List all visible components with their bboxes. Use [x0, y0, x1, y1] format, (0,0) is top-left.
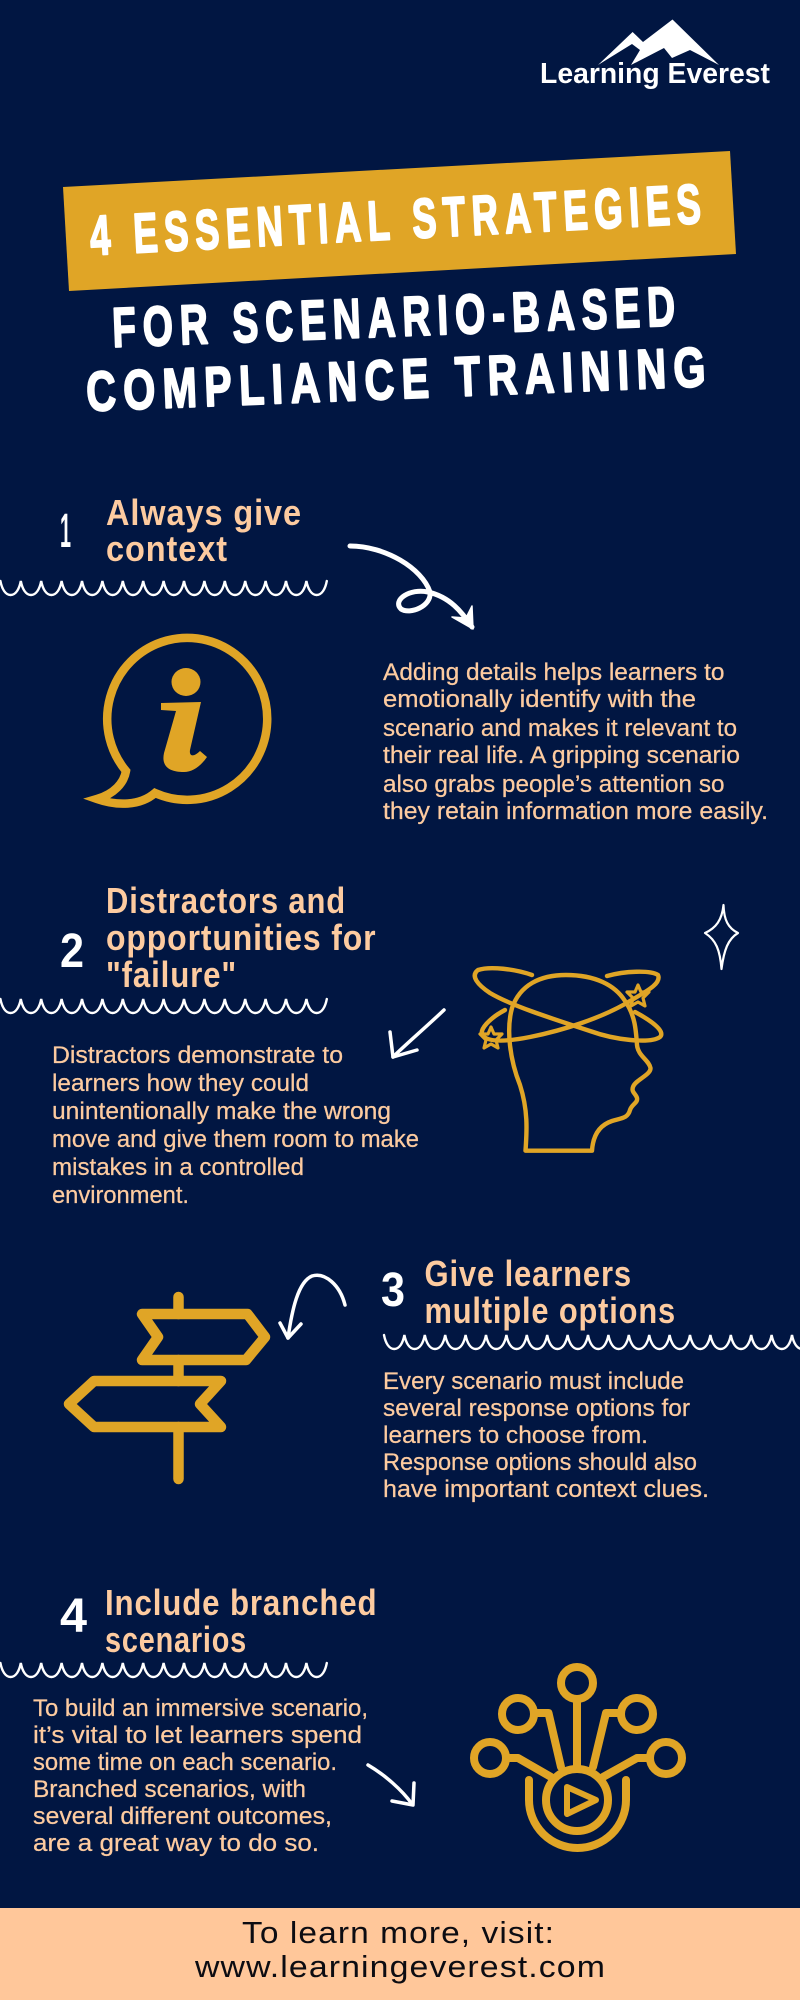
- heading text: scenarios: [105, 1619, 247, 1660]
- icon: signpost: [69, 1297, 265, 1479]
- footer text: To learn more, visit:: [242, 1915, 555, 1950]
- section 3 body text: learners to choose from.: [383, 1422, 648, 1449]
- section 3 body text: [383, 1368, 709, 1503]
- section 3 body text: Response options should also: [383, 1449, 697, 1476]
- icon: branching video network: [474, 1667, 682, 1848]
- section 2 body text: unintentionally make the wrong: [52, 1098, 391, 1125]
- number 3: 3: [381, 1264, 405, 1317]
- heading text: Always give: [106, 492, 302, 533]
- number 2: 2: [60, 925, 84, 978]
- section 2 body text: mistakes in a controlled: [52, 1154, 304, 1181]
- icon: sparkle: [705, 905, 738, 969]
- section 2 body text: [52, 1042, 419, 1209]
- section 1 body text: Adding details helps learners to: [383, 659, 724, 686]
- heading text: [106, 880, 376, 995]
- section 2 body text: Distractors demonstrate to: [52, 1042, 343, 1069]
- arrow: section 4: [368, 1765, 414, 1805]
- heading text: Distractors and: [106, 880, 346, 921]
- heading text: "failure": [106, 954, 237, 995]
- footer bar: [0, 1908, 800, 2000]
- section 1 heading: 1: [60, 505, 71, 558]
- heading text: [105, 1582, 378, 1660]
- section 1 body text: also grabs people’s attention so: [383, 771, 724, 798]
- logo wordmark: Learning Everest: [540, 58, 770, 90]
- section 3 body text: have important context clues.: [383, 1476, 709, 1503]
- section 3 body text: Every scenario must include: [383, 1368, 684, 1395]
- heading text: [424, 1253, 676, 1331]
- number 4: 4: [60, 1590, 87, 1643]
- icon: letter i: [161, 668, 207, 772]
- footer text: www.learningeverest.com: [194, 1949, 606, 1984]
- heading text: Include branched: [105, 1582, 378, 1623]
- section 1 body text: they retain information more easily.: [383, 798, 768, 825]
- section 4 body text: it’s vital to let learners spend: [33, 1722, 362, 1749]
- section 4 body text: [33, 1695, 368, 1857]
- title: subtitle lines: [85, 274, 714, 423]
- section 1 body text: [383, 659, 768, 825]
- heading text: Give learners: [424, 1253, 632, 1294]
- section 4 heading: [60, 1582, 378, 1660]
- section 3 heading: [381, 1253, 676, 1331]
- section 3 body text: several response options for: [383, 1395, 690, 1422]
- section 2 body text: environment.: [52, 1182, 189, 1209]
- icon: info speech bubble: [97, 638, 267, 804]
- section 2 body text: learners how they could: [52, 1070, 309, 1097]
- arrow: section 2: [390, 1010, 444, 1057]
- section 4 body text: are a great way to do so.: [33, 1830, 319, 1857]
- section 1 heading: [60, 492, 302, 569]
- section 4 body text: Branched scenarios, with: [33, 1776, 306, 1803]
- arrow: section 1 loop arrow: [350, 546, 473, 629]
- section 4 body text: To build an immersive scenario,: [33, 1695, 368, 1722]
- icon: star right: [627, 985, 649, 1006]
- heading text: opportunities for: [106, 917, 376, 958]
- arrow: section 3: [280, 1275, 345, 1338]
- banner shape: [63, 151, 736, 291]
- icon: star left: [480, 1027, 502, 1048]
- section 2 body text: move and give them room to make: [52, 1126, 419, 1153]
- section 1 body text: scenario and makes it relevant to: [383, 715, 737, 742]
- footer text: [194, 1915, 606, 1984]
- heading text: multiple options: [424, 1290, 676, 1331]
- section 2 heading: [60, 880, 376, 995]
- section 4 body text: some time on each scenario.: [33, 1749, 337, 1776]
- title banner: [63, 151, 736, 291]
- heading text: [106, 492, 302, 569]
- logo: Learning Everest: [540, 20, 770, 90]
- section 4 body text: several different outcomes,: [33, 1803, 332, 1830]
- section 1 body text: their real life. A gripping scenario: [383, 742, 740, 769]
- heading text: context: [106, 528, 228, 569]
- section 1 body text: emotionally identify with the: [383, 686, 696, 713]
- icon: mountains: [598, 20, 719, 65]
- icon: dizzy head: [475, 968, 661, 1151]
